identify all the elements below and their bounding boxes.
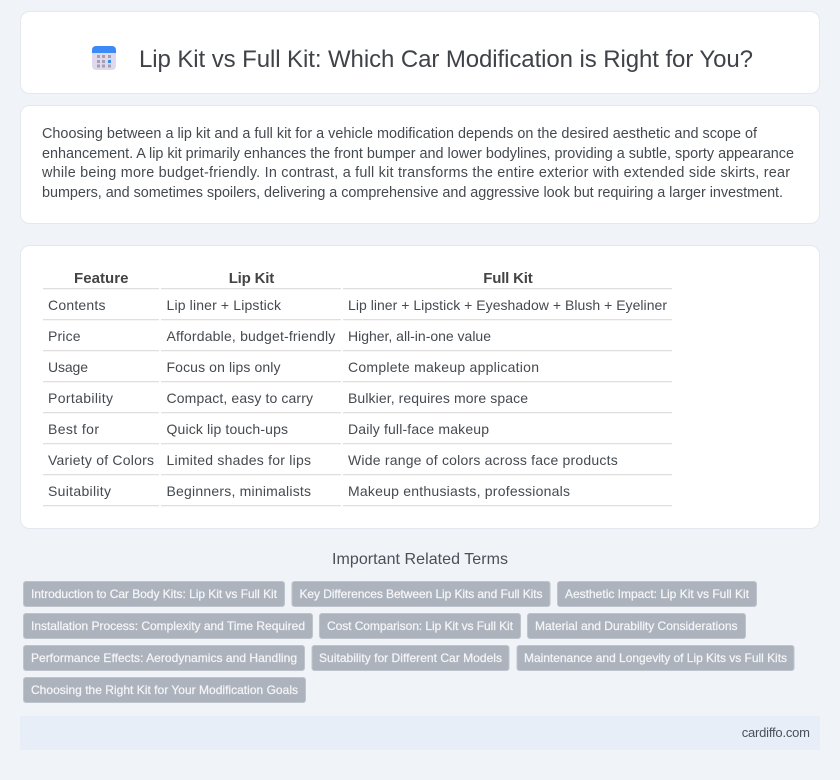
table row: portability: Portability [48, 390, 113, 406]
table row: portability: Compact, easy to carry [166, 390, 313, 406]
text block: introduction paragraph: while being more budget-friendly. In contrast, a full kit transforms the entire exterior with extended side skirts, rear [41, 165, 790, 181]
tag: performance effects [24, 646, 304, 670]
table row: best for: Quick lip touch-ups [166, 421, 288, 437]
table row: variety of colors: Variety of Colors [48, 452, 154, 468]
table row: price: Higher, all-in-one value [348, 328, 491, 344]
table row: price: Price [48, 328, 81, 344]
tag: material and durability [528, 614, 746, 638]
tag: material and durability: Material and Durability Considerations [535, 619, 738, 633]
panel: header [20, 12, 820, 94]
table row: price: Affordable, budget-friendly [166, 328, 335, 344]
tag: introduction to car body kits [24, 582, 284, 606]
table row: best for [43, 421, 672, 444]
table header row: Full Kit [483, 270, 533, 287]
table header row: Lip Kit [229, 270, 274, 287]
table row: contents: Lip liner + Lipstick + Eyeshadow + Blush + Eyeliner [348, 297, 667, 313]
tag: key differences: Key Differences Between Lip Kits and Full Kits [300, 587, 542, 601]
table row: variety of colors: Wide range of colors across face products [348, 452, 618, 468]
table row: variety of colors [43, 452, 672, 475]
tag: introduction to car body kits: Introduction to Car Body Kits: Lip Kit vs Full Kit [31, 587, 278, 601]
table row: suitability: Suitability [48, 483, 111, 499]
text block: introduction paragraph: enhancement. A lip kit primarily enhances the front bumper and lower bodylines, providing a subtle, sporty appearance [42, 146, 794, 162]
table row: best for: Best for [48, 421, 99, 437]
panel: introduction [20, 106, 820, 224]
table row: suitability [43, 483, 672, 506]
footer site name: cardiffo.com [742, 725, 810, 740]
table row: best for: Daily full-face makeup [348, 421, 489, 437]
tag: performance effects: Performance Effects: Aerodynamics and Handling [31, 651, 297, 665]
tag: suitability for car models [312, 646, 509, 670]
table row: usage: Complete makeup application [348, 359, 539, 375]
table row: suitability: Makeup enthusiasts, professionals [348, 483, 570, 499]
text block: introduction paragraph [41, 126, 794, 201]
title: Lip Kit vs Full Kit: Which Car Modification is Right for You? [139, 46, 753, 73]
related term tags [24, 582, 794, 702]
tag: choosing the right kit: Choosing the Right Kit for Your Modification Goals [31, 683, 298, 697]
table row: usage: Usage [48, 359, 88, 375]
tag: suitability for car models: Suitability for Different Car Models [319, 651, 502, 665]
table row: contents: Contents [48, 297, 106, 313]
table row: suitability: Beginners, minimalists [166, 483, 311, 499]
table row: price [43, 328, 672, 351]
tag: aesthetic impact [558, 582, 756, 606]
tag: key differences [292, 582, 550, 606]
table row: usage: Focus on lips only [166, 359, 280, 375]
tag: choosing the right kit [24, 678, 306, 702]
heading: important related terms: Important Related Terms [332, 551, 508, 568]
tag: maintenance and longevity: Maintenance and Longevity of Lip Kits vs Full Kits [524, 651, 787, 665]
panel: comparison table [20, 246, 820, 528]
table row: portability [43, 390, 672, 413]
tag: installation process: Installation Process: Complexity and Time Required [31, 619, 305, 633]
footer [20, 716, 820, 750]
table header row [43, 270, 672, 289]
icon: calendar grid [92, 46, 116, 70]
tag: installation process [24, 614, 312, 638]
tag: maintenance and longevity [517, 646, 794, 670]
text block: introduction paragraph: Choosing between a lip kit and a full kit for a vehicle modification depends on the desired aesthetic and scope of [42, 126, 758, 142]
table row: contents: Lip liner + Lipstick [166, 297, 282, 313]
tag: cost comparison [320, 614, 520, 638]
tag: aesthetic impact: Aesthetic Impact: Lip Kit vs Full Kit [565, 587, 750, 601]
table row: portability: Bulkier, requires more space [348, 390, 528, 406]
table header row: Feature [74, 270, 128, 287]
table row: contents [43, 297, 672, 320]
table row: usage [43, 359, 672, 382]
text block: introduction paragraph: bumpers, and sometimes spoilers, delivering a comprehensive and aggressive look but requiring a larger investment. [42, 185, 783, 201]
table row: variety of colors: Limited shades for lips [166, 452, 311, 468]
tag: cost comparison: Cost Comparison: Lip Kit vs Full Kit [327, 619, 514, 633]
